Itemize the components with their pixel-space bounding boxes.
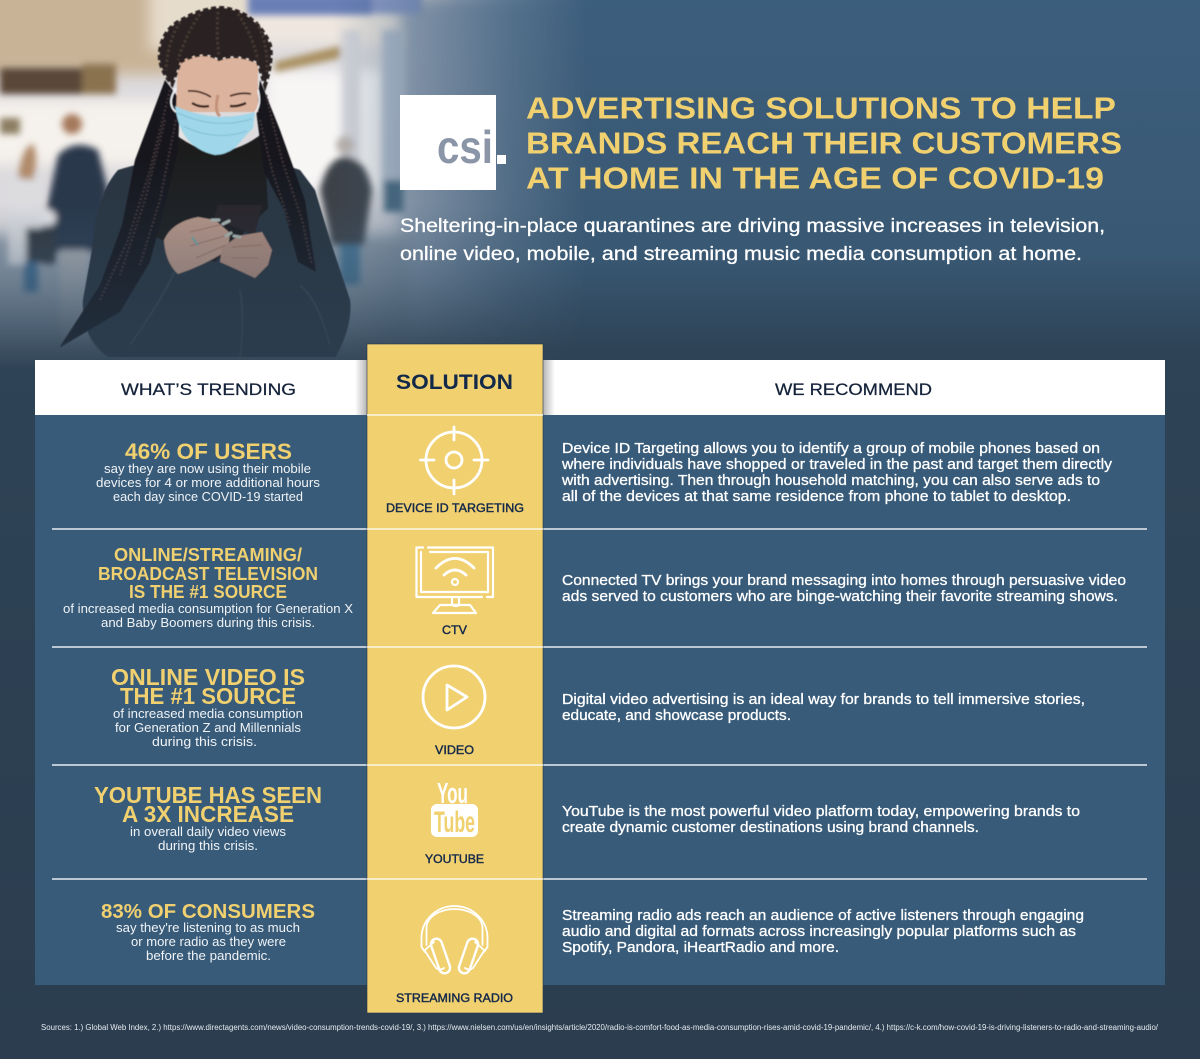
row 3: trend: of increased media consumption (113, 706, 303, 721)
title: BRANDS REACH THEIR CUSTOMERS (526, 126, 1122, 160)
row 5: recommendation: Streaming radio ads reach an audience of active listeners through engaging (562, 908, 1084, 924)
row 4: icon youtube: You (437, 778, 468, 810)
right braids (256, 80, 316, 272)
subtitle: Sheltering-in-place quarantines are driving massive increases in television, (400, 215, 1105, 237)
header: what's trending: WHAT’S TRENDING (121, 381, 296, 399)
row 3: recommendation: educate, and showcase products. (562, 708, 791, 724)
row 3: trend (111, 664, 305, 749)
title: AT HOME IN THE AGE OF COVID-19 (526, 160, 1104, 196)
row 3: recommendation: Digital video advertising is an ideal way for brands to tell immersive stories, (562, 692, 1085, 708)
row 2: recommendation: Connected TV brings your brand messaging into homes through persuasive video (562, 573, 1126, 589)
row 1: trend: 46% OF USERS (125, 439, 292, 464)
header: solution: SOLUTION (396, 370, 513, 394)
row 2: trend: ONLINE/STREAMING/ (114, 544, 302, 565)
row 4: trend: YOUTUBE HAS SEEN (94, 782, 322, 808)
title: ADVERTISING SOLUTIONS TO HELP (526, 90, 1116, 126)
row 2: trend: of increased media consumption for Generation X (63, 601, 353, 616)
row 1: icon label: DEVICE ID TARGETING (386, 501, 524, 515)
row 1: recommendation: where individuals have shopped or traveled in the past and target them directly (561, 457, 1113, 473)
row 1: trend: say they are now using their mobile (104, 461, 311, 476)
yellow solution column (367, 344, 543, 1013)
row 4: trend: during this crisis. (158, 838, 258, 853)
row 4: icon youtube (431, 778, 478, 839)
row 4: trend: in overall daily video views (130, 824, 287, 839)
face (176, 55, 258, 112)
row 1: recommendation: all of the devices at that same residence from phone to tablet to desktop. (562, 489, 1071, 505)
row 1: recommendation (561, 441, 1113, 505)
header: we recommend: WE RECOMMEND (775, 381, 932, 399)
logo: csi: csi (437, 121, 493, 173)
row 2: icon label: CTV (442, 623, 467, 637)
row 2: icon tv (416, 548, 493, 613)
subtitle: online video, mobile, and streaming music media consumption at home. (400, 243, 1082, 265)
row 1: icon target (420, 427, 488, 494)
ear loops (171, 88, 259, 114)
row 3: icon label: VIDEO (435, 743, 474, 757)
row 2: trend: BROADCAST TELEVISION (98, 563, 318, 584)
row 3: trend: ONLINE VIDEO IS (111, 664, 305, 690)
hair top (160, 8, 271, 85)
left braids (60, 80, 180, 347)
jacket (83, 155, 350, 358)
row 5: recommendation: Spotify, Pandora, iHeartRadio and more. (562, 940, 839, 956)
row 3: trend: THE #1 SOURCE (120, 683, 296, 709)
row 4: trend (94, 782, 322, 853)
row 3: trend: for Generation Z and Millennials (115, 720, 301, 735)
row 1: recommendation: with advertising. Then through household matching, you can also serve ads to (561, 473, 1100, 489)
row 1: recommendation: Device ID Targeting allows you to identify a group of mobile phones based on (562, 441, 1100, 457)
scarf (156, 135, 268, 262)
row 4: recommendation: create dynamic customer destinations using brand channels. (562, 820, 979, 836)
row 5: recommendation: audio and digital ad formats across increasingly popular platforms such as (562, 924, 1076, 940)
row 3: icon play (423, 666, 485, 728)
row 2: recommendation (562, 573, 1126, 605)
logo: csi (400, 95, 506, 190)
row 2: recommendation: ads served to customers who are binge-watching their favorite streaming shows. (562, 589, 1118, 605)
hands (164, 217, 230, 274)
subtitle (400, 215, 1105, 265)
row 1: trend: each day since COVID-19 started (113, 489, 303, 504)
row 4: icon label: YOUTUBE (425, 852, 484, 866)
phone (214, 205, 262, 234)
title (526, 90, 1122, 196)
sources footnote: Sources: 1.) Global Web Index, 2.) https://www.directagents.com/news/video-consumption-trends-covid-19/, 3.) https://www.nielsen.com/us/en/insights/article/2020/radio-is-comfort-food-as-media-consumption-rises-amid-covid-19-pandemic/, 4.) https://c-k.com/how-covid-19-is-driving-listeners-to-radio-and-streaming-audio/ (41, 1023, 1159, 1032)
row 4: icon youtube: Tube (434, 806, 475, 839)
hero photo: blurred concourse background (0, 0, 568, 359)
table (35, 344, 1165, 1013)
row 5: trend: or more radio as they were (131, 934, 286, 949)
row 5: trend (101, 900, 315, 963)
row 5: recommendation (562, 908, 1084, 956)
row 5: trend: before the pandemic. (146, 948, 271, 963)
row 5: trend: say they're listening to as much (116, 920, 300, 935)
row 2: trend: IS THE #1 SOURCE (129, 581, 287, 602)
row 2: trend: and Baby Boomers during this crisis. (101, 615, 315, 630)
row 5: icon headphones (422, 906, 488, 975)
row 1: trend: devices for 4 or more additional hours (96, 475, 321, 490)
row 5: trend: 83% OF CONSUMERS (101, 900, 315, 923)
mask (175, 106, 255, 155)
row 3: trend: during this crisis. (152, 734, 257, 749)
row dividers (52, 529, 1147, 879)
row 4: trend: A 3X INCREASE (122, 801, 294, 827)
row 1: trend (96, 439, 321, 504)
hero photo: woman in mask using phone (60, 8, 350, 358)
row 4: recommendation: YouTube is the most powerful video platform today, empowering brands to (562, 804, 1080, 820)
row 2: trend (63, 544, 353, 630)
row 4: recommendation (562, 804, 1080, 836)
row 3: recommendation (562, 692, 1085, 724)
row 5: icon label: STREAMING RADIO (396, 991, 513, 1005)
